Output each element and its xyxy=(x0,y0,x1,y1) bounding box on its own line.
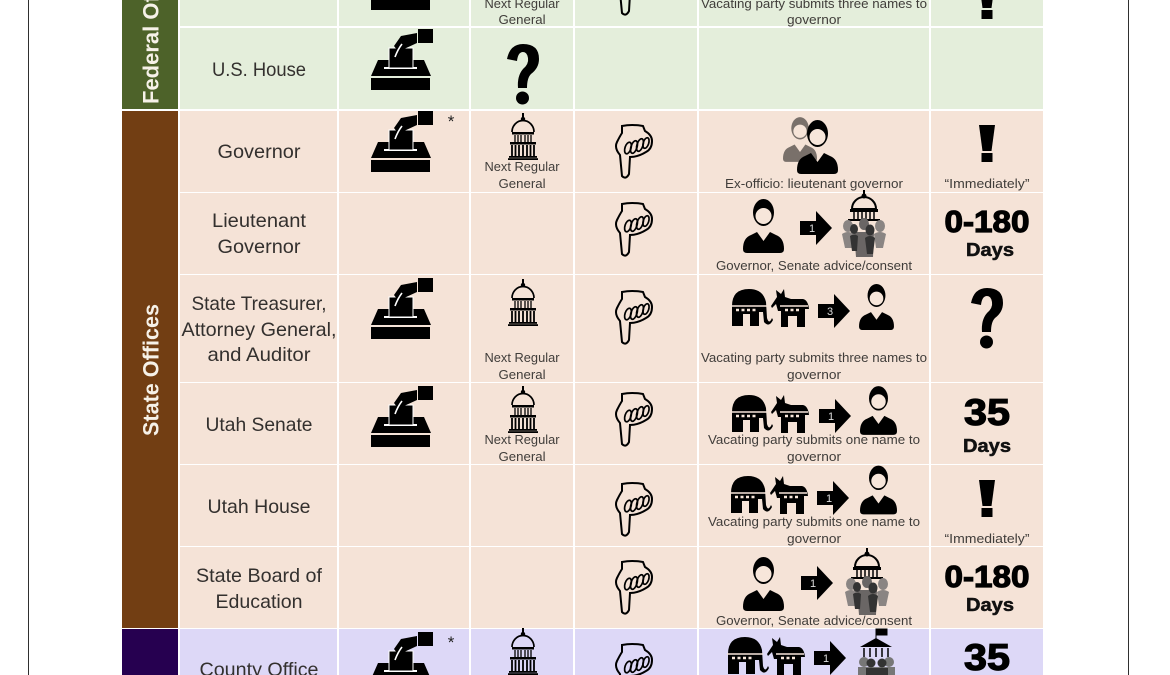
row: State Board of Education xyxy=(196,548,1030,628)
row: County Office: * xyxy=(448,633,455,652)
row: U.S. Senate (cropped): General xyxy=(498,12,546,27)
row: Governor: Governor xyxy=(218,141,301,163)
row: Utah Senate: Vacating party submits one name to xyxy=(708,432,920,447)
row: Utah Senate: Next Regular xyxy=(484,432,560,447)
category band: state offices: State Offices xyxy=(138,304,164,436)
row: Lieutenant Governor: Lieutenant xyxy=(212,210,307,232)
row: State Treasurer, Attorney General, and Auditor: Next Regular xyxy=(484,350,560,365)
row: State Board of Education: 0-180 xyxy=(944,559,1030,594)
row: Governor: Next Regular xyxy=(484,159,560,174)
row: County Office: 1 xyxy=(823,653,829,665)
row: Utah Senate: Utah Senate xyxy=(206,414,312,436)
row: Governor: “Immediately” xyxy=(944,176,1030,191)
row: State Treasurer, Attorney General, and Auditor: State Treasurer, xyxy=(192,293,326,315)
row: Governor: * xyxy=(448,112,455,131)
row: Utah Senate: governor xyxy=(787,449,842,464)
row: State Board of Education: Governor, Senate advice/consent xyxy=(716,613,912,628)
row: Utah House: “Immediately” xyxy=(944,531,1030,546)
row: Utah House: Utah House xyxy=(208,496,310,518)
row: Utah House: 1 xyxy=(826,493,832,505)
row: U.S. House: U.S. House xyxy=(212,59,306,81)
row: U.S. Senate (cropped) xyxy=(371,0,995,27)
row: State Treasurer, Attorney General, and Auditor: Attorney General, xyxy=(182,319,336,341)
row: County Office xyxy=(200,628,1010,675)
row: Utah Senate: 35 xyxy=(964,392,1010,433)
category band: county xyxy=(122,629,178,675)
row: Utah Senate: 1 xyxy=(828,411,834,423)
icon: county building and crowd xyxy=(858,629,895,675)
row: Utah Senate: Days xyxy=(963,436,1011,456)
row: Governor: Ex-officio: lieutenant governor xyxy=(725,176,904,191)
row: Lieutenant Governor: 1 xyxy=(809,223,815,235)
row: Utah House: Vacating party submits one name to xyxy=(708,514,920,529)
row: State Treasurer, Attorney General, and Auditor: General xyxy=(498,367,546,382)
row: State Treasurer, Attorney General, and Auditor: Vacating party submits three names to xyxy=(701,350,927,365)
panel: federal offices xyxy=(122,0,1043,109)
panel: state offices xyxy=(122,111,1043,628)
row: Governor: General xyxy=(498,176,546,191)
row: Lieutenant Governor: Governor, Senate advice/consent xyxy=(716,258,912,273)
row: Governor xyxy=(218,111,1030,191)
row: Lieutenant Governor: Days xyxy=(966,240,1014,260)
row: Lieutenant Governor: 0-180 xyxy=(944,204,1030,239)
row: U.S. House xyxy=(212,29,539,104)
row: State Treasurer, Attorney General, and Auditor xyxy=(182,278,1003,382)
row: State Treasurer, Attorney General, and Auditor: 3 xyxy=(827,306,833,318)
row: State Board of Education: Education xyxy=(216,591,302,613)
row: State Board of Education: 1 xyxy=(810,578,816,590)
row: Lieutenant Governor: Governor xyxy=(218,236,301,258)
row: U.S. Senate (cropped): governor xyxy=(787,12,842,27)
row: State Treasurer, Attorney General, and Auditor: governor xyxy=(787,367,842,382)
row: State Treasurer, Attorney General, and Auditor: and Auditor xyxy=(208,344,311,366)
row: Utah Senate xyxy=(206,386,1011,464)
row: Utah House: governor xyxy=(787,531,842,546)
category band: state offices xyxy=(122,111,178,628)
row: Lieutenant Governor xyxy=(212,190,1030,273)
panel: county offices xyxy=(122,628,1043,675)
row: Utah House xyxy=(208,466,1030,546)
category band: federal offices xyxy=(122,0,178,109)
row: State Board of Education: Days xyxy=(966,595,1014,615)
row: Utah Senate: General xyxy=(498,449,546,464)
row: State Board of Education: State Board of xyxy=(196,565,323,587)
